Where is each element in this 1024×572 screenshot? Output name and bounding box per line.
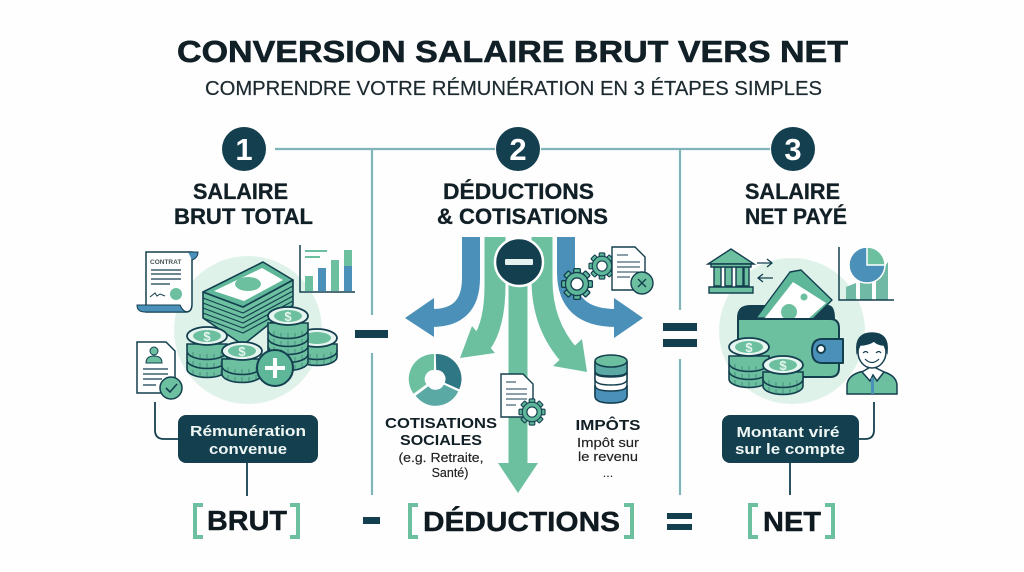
deductions flow arrows — [405, 237, 643, 493]
step 1 badge — [222, 127, 266, 171]
icon: employee document — [137, 342, 182, 399]
title: CONVERSION SALAIRE BRUT VERS NET — [177, 34, 848, 69]
text: cotisations sociales: COTISATIONS — [385, 415, 497, 432]
heading: déductions et cotisations — [437, 179, 608, 229]
subtitle: COMPRENDRE VOTRE RÉMUNÉRATION EN 3 ÉTAPES SIMPLES — [205, 77, 822, 100]
icon: back coin stack — [297, 329, 337, 366]
icon: minus circle — [495, 238, 543, 286]
text: impôts — [576, 416, 640, 480]
icon: pie chart with bars — [839, 247, 894, 300]
text: impôts: Impôt sur — [577, 436, 639, 450]
text: impôts: le revenu — [578, 450, 638, 464]
formula: brut: BRUT — [207, 505, 287, 536]
icon: document with gear — [501, 374, 545, 425]
icon: gears and document — [562, 247, 653, 299]
illustration: net salary — [708, 247, 897, 404]
icon: coin stacks: $ — [779, 358, 787, 373]
icon: tall coin stack: $ — [284, 309, 292, 324]
icon: wallet — [738, 270, 843, 377]
heading: salaire brut total: SALAIRE — [193, 179, 288, 204]
step 3 badge: 3 — [784, 132, 802, 167]
icon: contract: CONTRAT — [150, 259, 181, 266]
icon: database — [595, 355, 627, 403]
icon: left coin stack — [187, 327, 227, 378]
icon: tall coin stack — [268, 307, 308, 370]
icon: bank — [708, 249, 754, 293]
heading: déductions et cotisations: & COTISATIONS — [437, 204, 608, 229]
text: impôts: ... — [603, 466, 613, 480]
icon: plus — [257, 350, 293, 386]
icon: smiling person — [847, 333, 897, 394]
text: cotisations sociales — [385, 415, 497, 480]
text: cotisations sociales: (e.g. Retraite, — [398, 451, 484, 465]
formula: equals — [667, 513, 692, 530]
illustration: gross salary — [137, 245, 355, 404]
icon: contract — [137, 252, 198, 312]
step 2 badge: 2 — [509, 132, 527, 167]
callout: rémunération convenue: Rémunération — [190, 423, 306, 440]
formula: minus — [363, 517, 380, 524]
text: cotisations sociales: SOCIALES — [400, 432, 482, 449]
step 3 badge — [771, 127, 815, 171]
formula: net — [750, 505, 833, 537]
icon: donut chart — [417, 362, 454, 398]
operator: minus — [355, 330, 388, 338]
step 1 badge: 1 — [235, 132, 253, 167]
callout: montant viré sur le compte: sur le compte — [735, 441, 845, 458]
callout connector right — [790, 402, 874, 495]
heading: salaire net payé — [745, 179, 847, 229]
icon: left coin stack: $ — [203, 329, 211, 344]
step 2 badge — [496, 127, 540, 171]
callout: rémunération convenue — [178, 415, 318, 463]
icon: bar chart — [300, 245, 355, 292]
heading: salaire brut total: BRUT TOTAL — [174, 204, 313, 229]
operator: equals — [663, 323, 697, 347]
icon: transfer arrows — [757, 259, 773, 282]
heading: déductions et cotisations: DÉDUCTIONS — [443, 179, 594, 204]
icon: banknote stack — [203, 262, 293, 345]
callout: montant viré sur le compte — [722, 415, 859, 463]
icon: front coin stack: $ — [238, 344, 246, 359]
icon: coin stacks — [729, 338, 803, 394]
formula: net: NET — [763, 506, 821, 537]
callout: montant viré sur le compte: Montant viré — [736, 424, 840, 441]
heading: salaire brut total — [174, 179, 313, 229]
text: cotisations sociales: Santé) — [432, 466, 468, 480]
callout connector left — [155, 402, 247, 496]
heading: salaire net payé: SALAIRE — [745, 179, 840, 204]
connector lines — [275, 149, 770, 495]
icon: coin stacks: $ — [745, 340, 753, 355]
callout: rémunération convenue: convenue — [209, 441, 287, 458]
text: impôts: IMPÔTS — [576, 416, 640, 434]
heading: salaire net payé: NET PAYÉ — [745, 204, 847, 229]
icon: front coin stack — [222, 342, 262, 382]
formula: déductions: DÉDUCTIONS — [423, 506, 620, 537]
